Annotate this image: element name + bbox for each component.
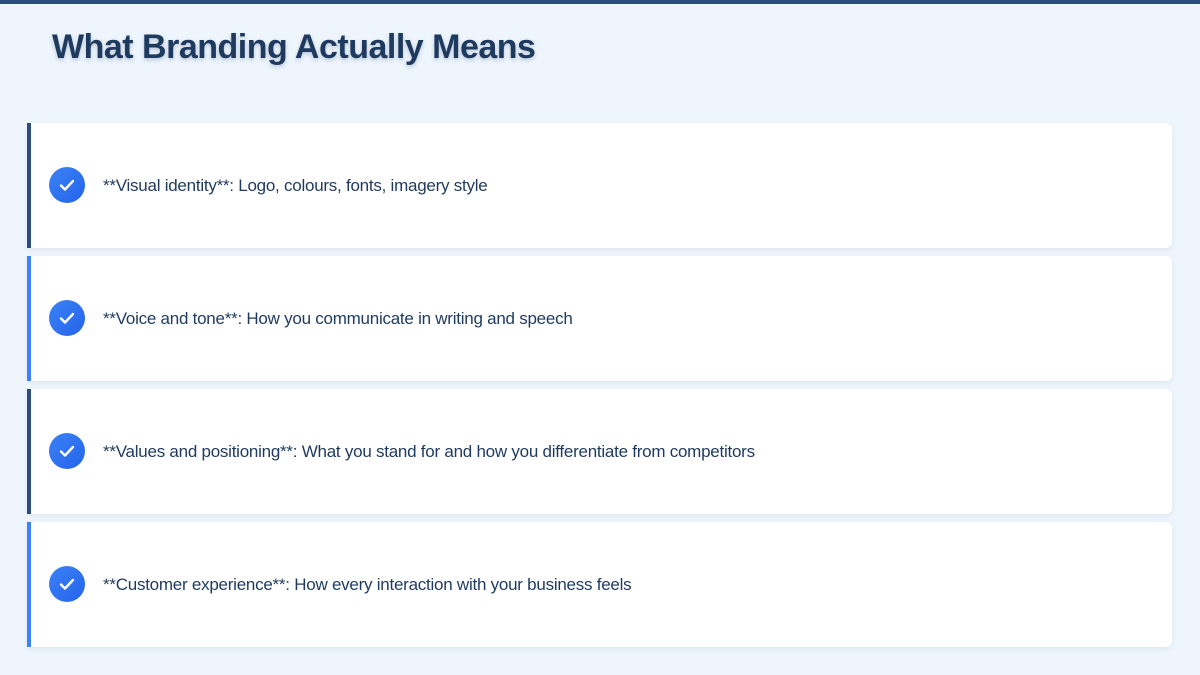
title: What Branding Actually Means xyxy=(52,28,535,66)
card: voice and tone xyxy=(27,256,1172,381)
card: visual identity xyxy=(27,123,1172,248)
card: customer experience xyxy=(27,522,1172,647)
text: **Visual identity**: Logo, colours, fonts, imagery style xyxy=(103,176,487,195)
icon: check xyxy=(49,566,85,602)
text: **Customer experience**: How every interaction with your business feels xyxy=(103,575,631,594)
text: **Voice and tone**: How you communicate in writing and speech xyxy=(103,309,573,328)
text: **Values and positioning**: What you stand for and how you differentiate from competitors xyxy=(103,442,755,461)
icon: check xyxy=(49,167,85,203)
icon: check xyxy=(49,300,85,336)
icon: check xyxy=(49,433,85,469)
card: values and positioning xyxy=(27,389,1172,514)
